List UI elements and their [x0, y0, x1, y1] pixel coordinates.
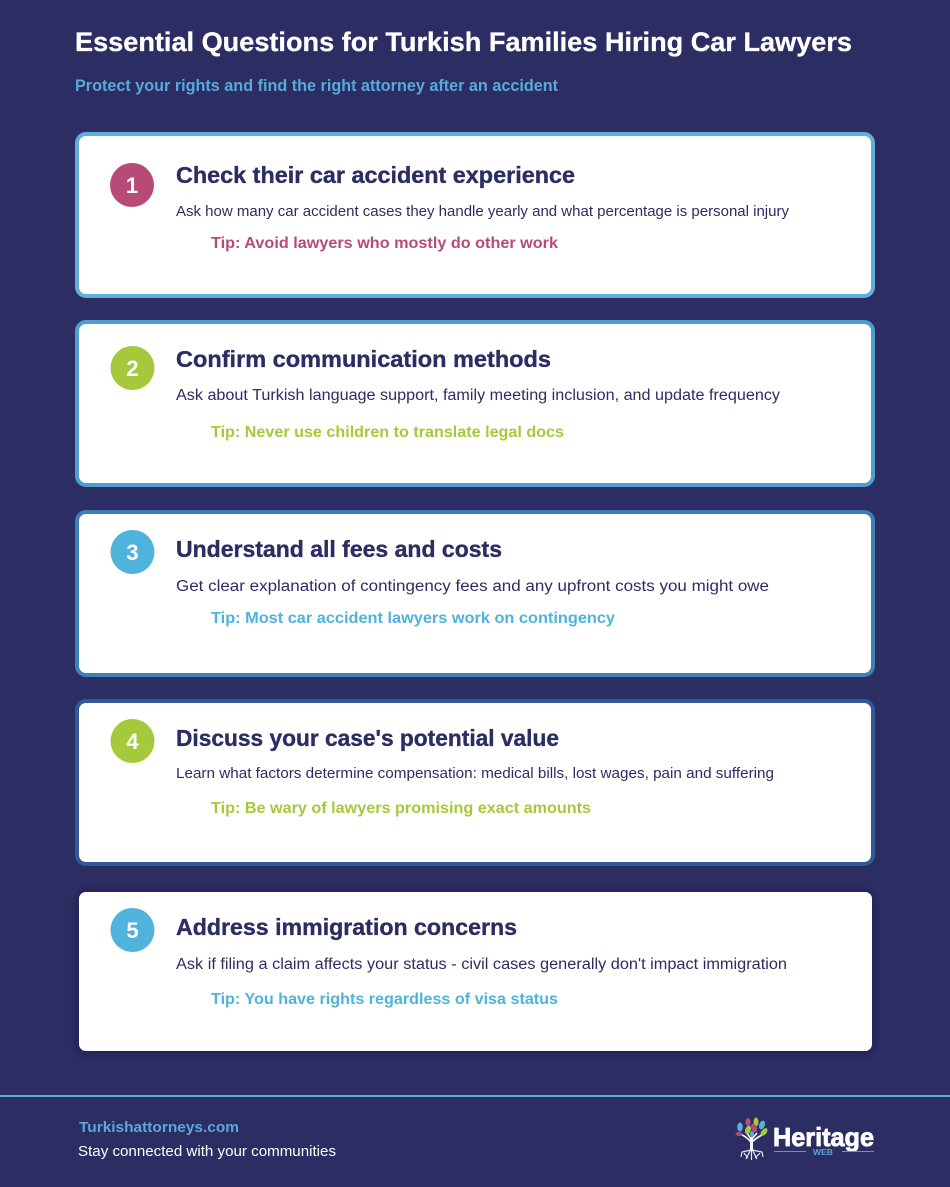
- icon: number 5: [110, 908, 154, 952]
- step 5 tip: Tip: You have rights regardless of visa status: [211, 991, 558, 1008]
- step 4 description: Learn what factors determine compensation: medical bills, lost wages, pain and suffering: [176, 766, 774, 782]
- icon: number 2: [110, 346, 154, 390]
- title: Essential Questions for Turkish Families Hiring Car Lawyers: [75, 27, 852, 57]
- footer tagline: Stay connected with your communities: [78, 1143, 336, 1160]
- panel: step 2: [77, 322, 873, 485]
- step 2 description: Ask about Turkish language support, family meeting inclusion, and update frequency: [176, 387, 780, 404]
- panel: step 5: [79, 892, 872, 1051]
- icon: number 3: [110, 530, 154, 574]
- step 5 heading: Address immigration concerns: [176, 914, 517, 940]
- icon: number 4: 4: [126, 729, 139, 754]
- step 5 description: Ask if filing a claim affects your status - civil cases generally don't impact immigration: [176, 956, 787, 973]
- icon: number 3: 3: [126, 540, 139, 565]
- step 1 description: Ask how many car accident cases they handle yearly and what percentage is personal injury: [176, 204, 790, 220]
- step 4 heading: Discuss your case's potential value: [176, 725, 559, 751]
- step 4 tip: Tip: Be wary of lawyers promising exact amounts: [211, 800, 591, 817]
- icon: number 5: 5: [126, 918, 139, 943]
- panel: step 3: [77, 512, 873, 675]
- icon: number 1: 1: [126, 173, 138, 198]
- step 2 tip: Tip: Never use children to translate legal docs: [211, 424, 564, 441]
- step 3 heading: Understand all fees and costs: [176, 536, 502, 562]
- footer website: Turkishattorneys.com: [79, 1119, 239, 1136]
- panel: step 4: [77, 701, 873, 864]
- step 1 tip: Tip: Avoid lawyers who mostly do other work: [211, 235, 558, 252]
- icon: number 2: 2: [126, 356, 139, 381]
- logo sub-label: WEB: [813, 1148, 833, 1157]
- step 1 heading: Check their car accident experience: [176, 162, 575, 188]
- step 3 description: Get clear explanation of contingency fees and any upfront costs you might owe: [176, 578, 769, 595]
- step 3 tip: Tip: Most car accident lawyers work on contingency: [211, 610, 615, 627]
- panel: step 1: [77, 134, 873, 296]
- icon: number 4: [110, 719, 154, 763]
- icon: number 1: [110, 163, 154, 207]
- icon: tree: [736, 1118, 769, 1160]
- logo: Heritage Web: [736, 1118, 874, 1160]
- subtitle: Protect your rights and find the right attorney after an accident: [75, 77, 558, 95]
- step 2 heading: Confirm communication methods: [176, 346, 551, 372]
- logo wordmark: Heritage: [773, 1122, 874, 1152]
